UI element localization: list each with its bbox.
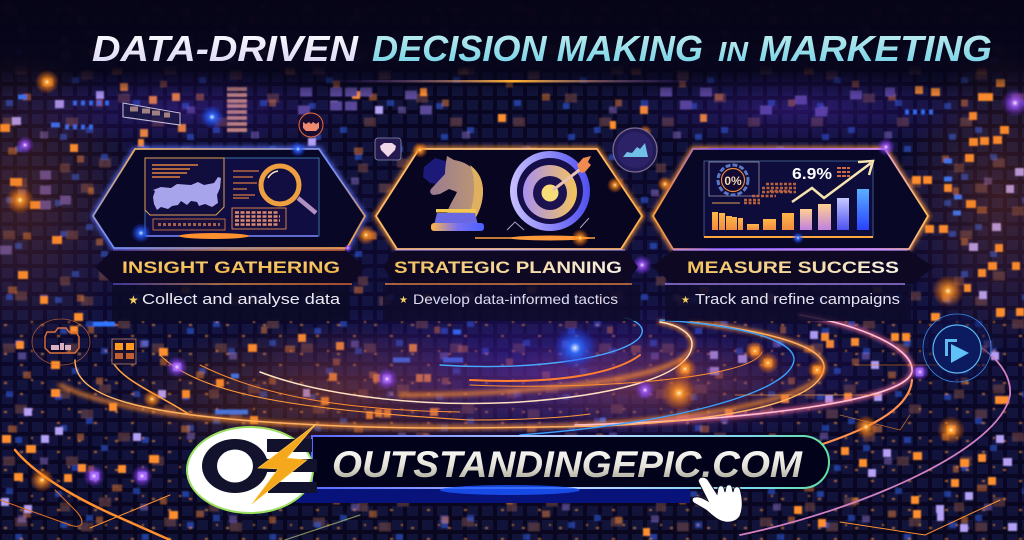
light flares	[6, 70, 1024, 492]
title: MARKETING	[759, 28, 992, 69]
icon: bat-face badge	[299, 113, 323, 137]
bullet text	[112, 285, 350, 321]
icon: mountain chart badge	[613, 128, 657, 172]
bullet text: ★	[399, 295, 408, 306]
heading band	[383, 250, 638, 284]
title: DATA-DRIVEN	[92, 28, 359, 69]
glow line	[475, 237, 595, 239]
bullet text: Collect and analyse data	[142, 291, 341, 308]
bullet text: Develop data-informed tactics	[413, 291, 618, 307]
magnifying glass	[261, 166, 316, 213]
hexagon frame	[93, 149, 365, 248]
panel: measure success	[652, 138, 934, 321]
heading band: STRATEGIC PLANNING	[394, 258, 622, 277]
target with arrow	[507, 151, 591, 231]
title: DECISION MAKING	[372, 28, 703, 69]
panel: strategic planning	[376, 142, 652, 321]
title underline	[333, 80, 696, 82]
hexagon frame	[653, 149, 928, 249]
dot staircase	[744, 184, 796, 203]
bullet text	[665, 285, 911, 321]
icon: pointing hand cursor	[692, 477, 742, 522]
panel: insight gathering	[93, 141, 365, 321]
heading band	[95, 250, 365, 284]
heading band: INSIGHT GATHERING	[122, 258, 340, 277]
world map	[153, 177, 221, 210]
icon: engine badge	[32, 319, 90, 365]
banner: outstandingepic.com	[296, 436, 829, 503]
bullet text: ★	[128, 293, 139, 307]
icon: heart badge	[375, 138, 401, 160]
hexagon frame	[376, 149, 642, 249]
gauge 0%: 0%	[724, 174, 742, 188]
bar chart	[712, 189, 869, 230]
bullet text: Track and refine campaigns	[695, 292, 900, 308]
chess knight	[423, 156, 484, 231]
glow line	[146, 235, 318, 237]
gauge 0%	[718, 165, 748, 195]
swirl of orbiting light arcs	[0, 315, 1010, 540]
bullet text	[383, 285, 640, 321]
hexagon glow	[653, 149, 928, 249]
icon: play button	[923, 314, 991, 382]
data table	[232, 208, 286, 229]
heading band	[652, 250, 934, 284]
heading band: MEASURE SUCCESS	[687, 258, 899, 277]
title	[92, 28, 992, 69]
hexagon glow	[376, 149, 642, 249]
icon: 4-square chip	[112, 339, 136, 364]
dashboard illustration	[145, 158, 319, 236]
title: IN	[718, 36, 749, 67]
value label: 6.9%	[792, 166, 832, 183]
trend arrow	[792, 161, 873, 202]
bullet text: ★	[681, 295, 690, 306]
logo: OE with lightning bolt	[187, 424, 317, 513]
banner: outstandingepic.com: OUTSTANDINGEPIC.COM	[332, 444, 803, 485]
icon: tilted data frame	[123, 103, 180, 125]
hexagon glow	[93, 149, 365, 248]
chart dashboard	[704, 161, 873, 237]
